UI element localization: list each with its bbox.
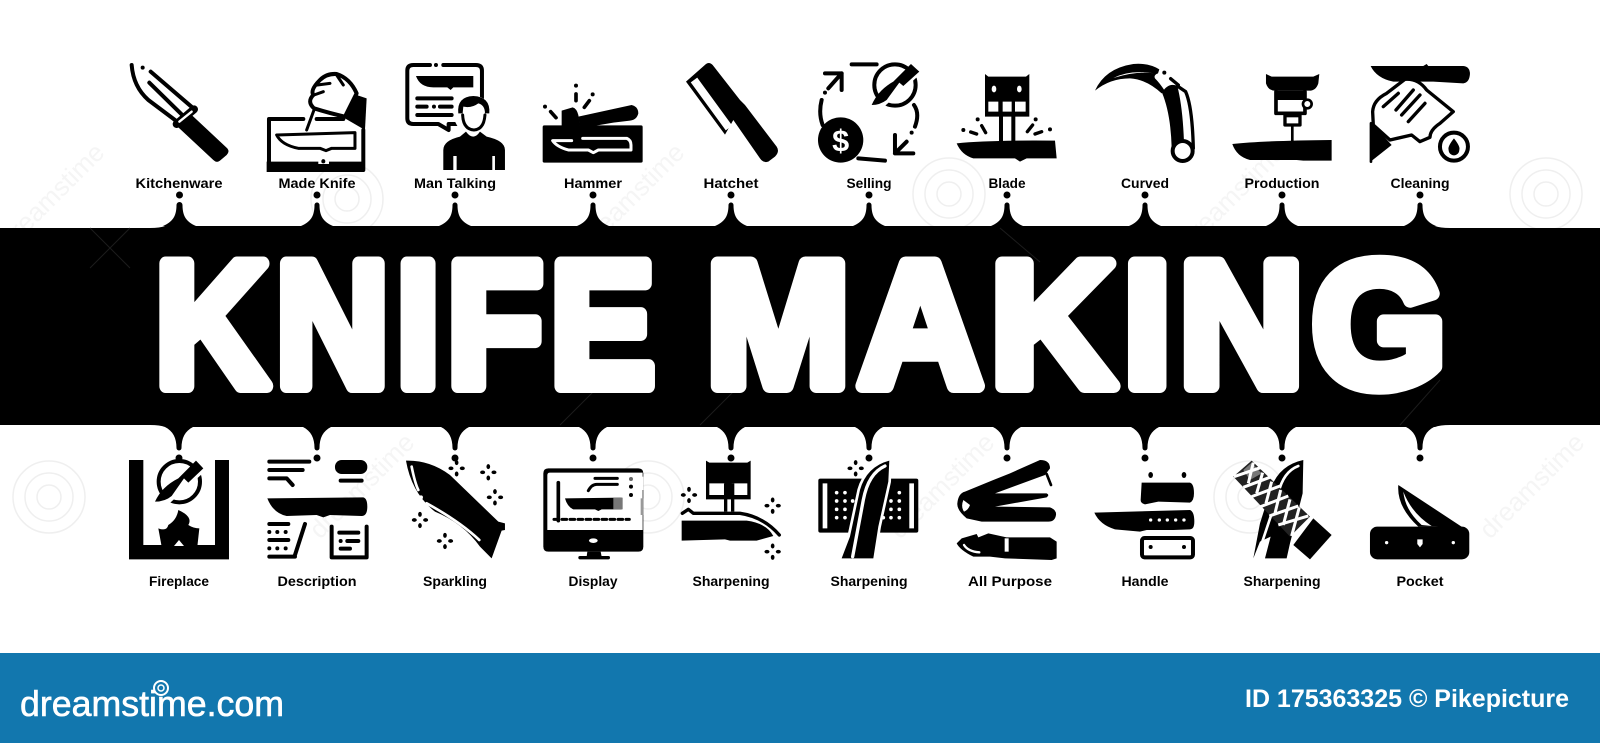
item: Blade — [957, 74, 1057, 226]
item: Sparkling — [406, 427, 505, 589]
connector — [303, 427, 331, 462]
item: Made Knife — [267, 74, 367, 226]
connector — [577, 192, 609, 226]
label: Selling — [846, 175, 892, 191]
title — [155, 225, 1454, 424]
label: Made Knife — [278, 175, 356, 191]
connector — [1268, 427, 1296, 462]
item: Display — [543, 427, 643, 589]
text: dreamstime — [1173, 137, 1290, 254]
icon: drilling machine over blade — [1232, 74, 1332, 161]
item: Sharpening 3 — [1233, 427, 1332, 589]
title: MAKING — [706, 225, 1454, 424]
connector — [1406, 427, 1434, 462]
item: Hammer — [543, 84, 643, 226]
connector — [1266, 192, 1298, 226]
icon: hand wiping knife — [1371, 64, 1470, 162]
footer credit: ID 175363325 © Pikepicture — [1245, 685, 1569, 713]
label: Blade — [988, 175, 1026, 191]
label: Man Talking — [414, 175, 496, 191]
label: Sparkling — [423, 573, 487, 589]
item: Kitchenware — [132, 65, 229, 226]
icon: sparkling machete — [406, 460, 505, 558]
connector — [993, 427, 1021, 462]
icon: knife on whetstone — [818, 460, 918, 558]
icon: fireplace with knife — [129, 460, 229, 559]
icon: knife with handle scales — [1094, 472, 1194, 557]
item: Production — [1232, 74, 1332, 226]
label: Sharpening — [1244, 573, 1320, 589]
connector — [163, 192, 196, 226]
connector — [715, 192, 747, 226]
item: Pocket — [1370, 427, 1469, 589]
icon: folding multi-purpose knives — [957, 460, 1057, 560]
text: dreamstime — [1473, 427, 1590, 544]
footer logo: dreamstime.com — [20, 683, 284, 724]
label: Sharpening — [692, 573, 770, 589]
connector — [165, 427, 193, 462]
icon: computer monitor with knife chart — [543, 468, 643, 558]
icon: curved karambit knife — [1095, 64, 1193, 161]
label: Fireplace — [149, 573, 209, 589]
connector — [717, 427, 745, 462]
label: Production — [1244, 175, 1320, 191]
icon: hammer on anvil — [543, 84, 643, 163]
icon: knife and coin exchange — [818, 64, 919, 163]
label: Curved — [1121, 175, 1169, 191]
item: Sharpening 1 — [681, 427, 781, 589]
item: Description — [267, 427, 367, 589]
central black band — [0, 226, 1600, 427]
icon: knife description sheet — [267, 460, 367, 557]
icon: knife and coin exchange: $ — [832, 124, 849, 158]
item: Fireplace — [129, 427, 229, 589]
label: Description — [278, 573, 356, 589]
icon: knife on sharpening machine — [681, 461, 781, 560]
connector — [853, 192, 885, 226]
item: Curved — [1095, 64, 1193, 226]
connector — [301, 192, 333, 226]
connector — [439, 192, 471, 226]
label: Kitchenware — [136, 175, 223, 191]
connector — [1131, 427, 1159, 462]
label: Hatchet — [704, 175, 759, 191]
label: Handle — [1122, 573, 1169, 589]
footer bar — [0, 653, 1600, 743]
item: Handle — [1094, 427, 1194, 589]
icon: knife and crosshatched file — [1233, 460, 1332, 559]
icon: hatchet — [686, 63, 778, 162]
item: Cleaning — [1371, 64, 1470, 226]
text: dreamstime — [883, 427, 1000, 544]
icon: kitchen knife — [132, 65, 229, 162]
connector — [1404, 192, 1436, 226]
label: Hammer — [564, 175, 623, 191]
item: All Purpose — [957, 427, 1057, 589]
text: dreamstime — [303, 427, 420, 544]
connector — [855, 427, 883, 462]
connector — [991, 192, 1023, 226]
label: Cleaning — [1390, 175, 1450, 191]
title: KNIFE — [155, 225, 662, 424]
connector — [579, 427, 607, 462]
item: Man Talking — [407, 63, 505, 226]
icon: pocket knife — [1370, 485, 1469, 559]
label: Pocket — [1396, 573, 1444, 589]
icon: man with speech bubble — [407, 63, 505, 170]
item: Sharpening 2 — [818, 427, 918, 589]
connector — [441, 427, 469, 462]
item: Hatchet — [686, 63, 778, 226]
label: All Purpose — [968, 573, 1052, 589]
label: Display — [568, 573, 618, 589]
label: Sharpening — [830, 573, 908, 589]
connector — [1129, 192, 1161, 226]
item: Selling — [818, 64, 919, 226]
icon: blade under grinder — [957, 74, 1057, 162]
text: dreamstime — [573, 137, 690, 254]
icon: hand carving a knife — [267, 74, 367, 172]
